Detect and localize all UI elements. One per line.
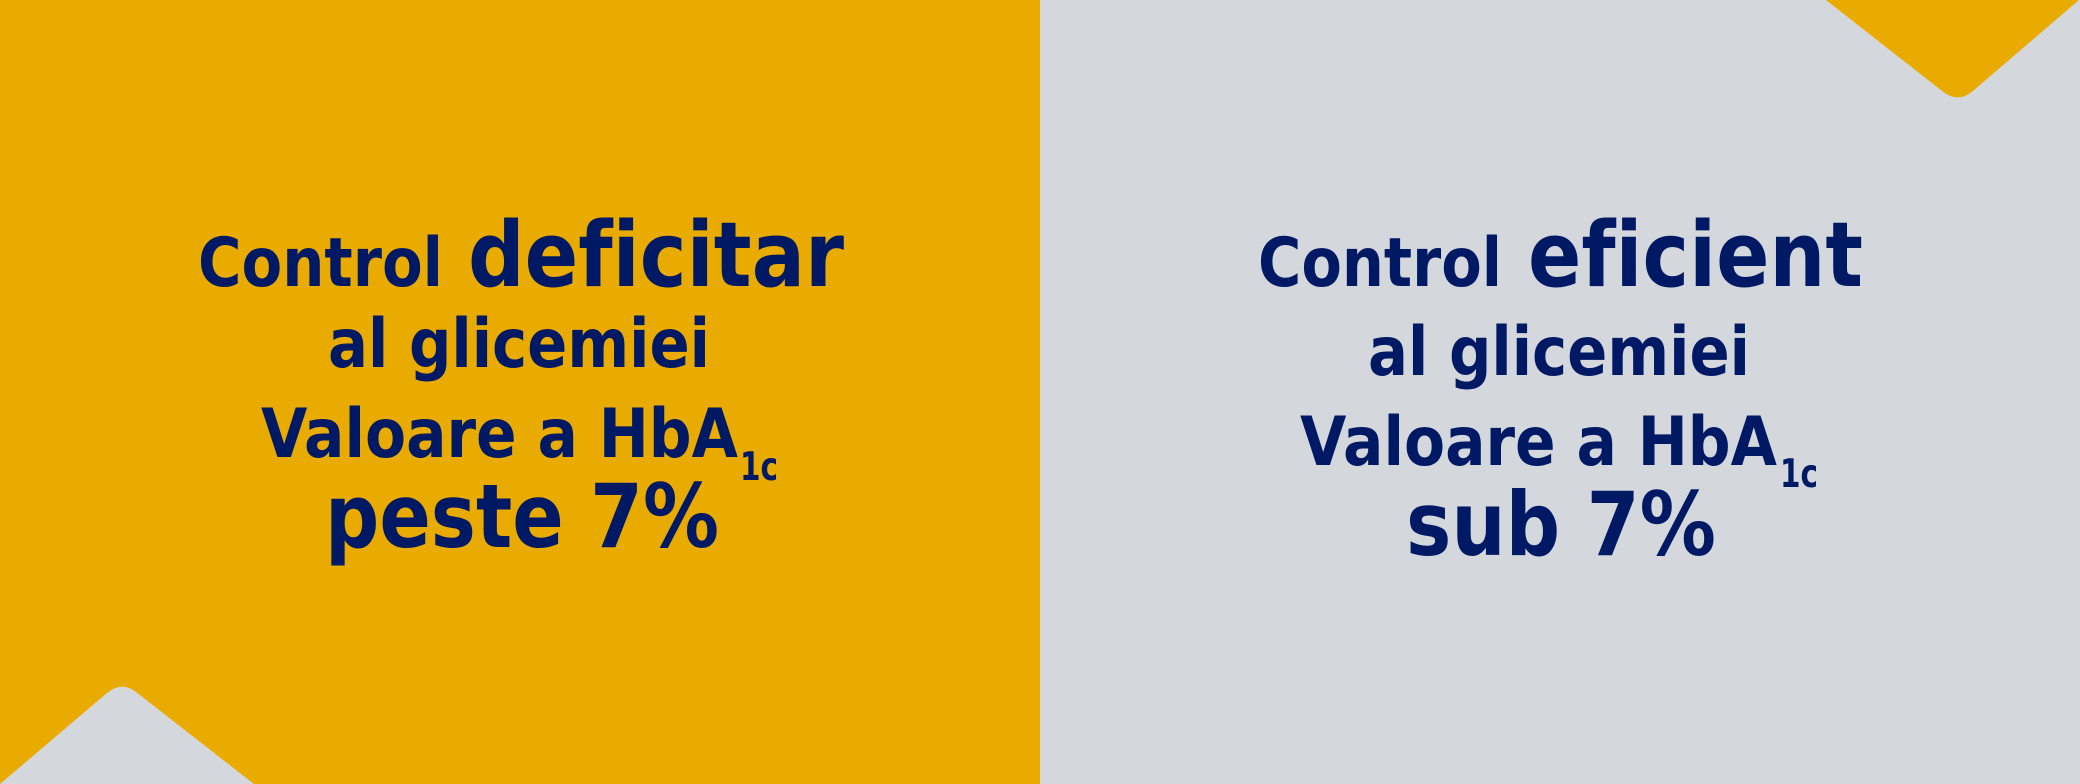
text: al glicemiei: al glicemiei (1368, 313, 1750, 392)
heading: Control deficitar (198, 203, 845, 308)
text: Valoare a HbA1c: 1c (1780, 452, 1818, 497)
heading: Control eficient (1258, 203, 1863, 308)
heading: Control eficient: eficient (1528, 203, 1863, 308)
text: al glicemiei: al glicemiei (328, 305, 710, 384)
notch: gold corner shape (1826, 0, 2079, 97)
heading: Control deficitar: Control (198, 224, 443, 303)
heading: Control eficient: Control (1258, 224, 1502, 303)
notch: grey corner shape (0, 687, 254, 784)
value: sub 7%: sub 7% (1406, 473, 1716, 576)
heading: Control deficitar: deficitar (468, 203, 845, 308)
value: peste 7%: peste 7% (325, 465, 719, 568)
panel: efficient glycemic control (1040, 0, 2080, 784)
panel: deficient glycemic control (0, 0, 1040, 784)
text: Valoare a HbA1c: 1c (740, 445, 778, 490)
text: Valoare a HbA1c: Valoare a HbA (261, 395, 738, 474)
text: Valoare a HbA1c: Valoare a HbA (1300, 403, 1777, 482)
